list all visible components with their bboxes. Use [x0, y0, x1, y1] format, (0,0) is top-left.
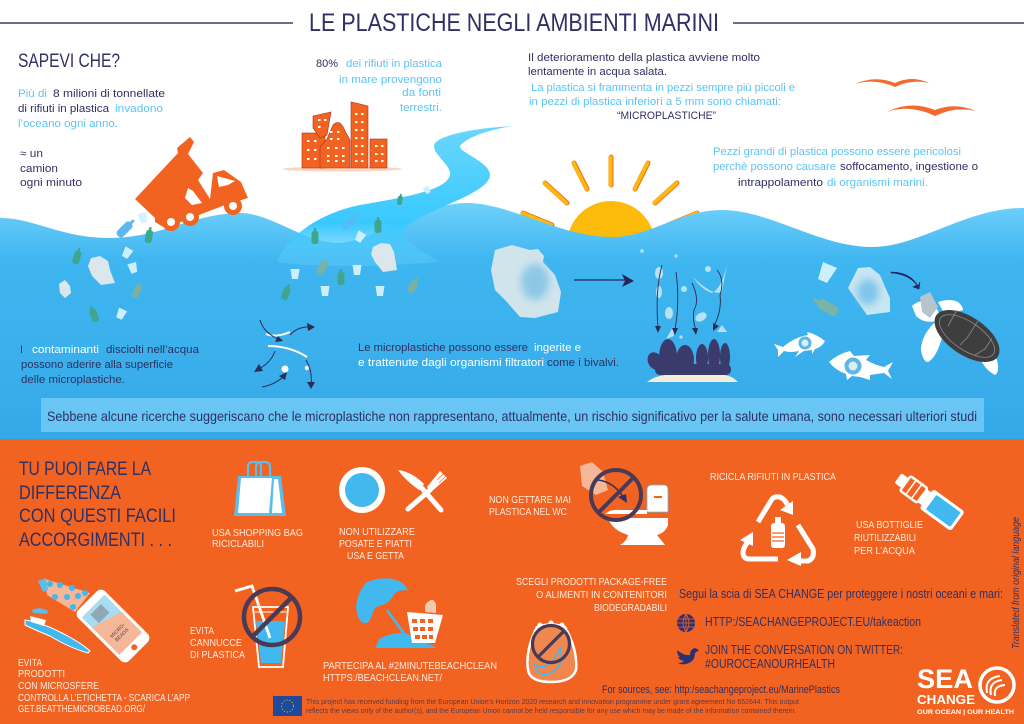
text block: pezzi grandi [713, 146, 978, 189]
icon: seagulls [855, 79, 976, 116]
icon: toilet [580, 462, 668, 545]
arrow: to turtle [891, 272, 920, 289]
text block: pezzi grandi: Pezzi grandi di plastica possono essere pericolosi [713, 146, 961, 158]
text block: 80 percent: dei rifiuti in plastica [346, 58, 443, 70]
text: sources: For sources, see: http:/seachangeproject.eu/MarinePlastics [602, 684, 840, 696]
text block: microplastiche definition [528, 52, 795, 122]
icon: city [282, 102, 402, 172]
label: microsfere: EVITA [18, 657, 42, 669]
text block: 8 milioni di tonnellate: di rifiuti in plastica [18, 103, 110, 115]
icon: toothpaste, toothbrush and phone: MICRO- [109, 622, 127, 640]
icon: EU flag [273, 696, 302, 716]
label: microsfere: CON MICROSFERE [18, 680, 99, 692]
plastic debris: river mouth [280, 185, 431, 301]
text block: 8 milioni di tonnellate: 8 milioni di tonnellate [53, 88, 165, 100]
text block: contaminanti: delle microplastiche. [21, 374, 125, 386]
text block: bivalvi: e trattenute dagli organismi filtratori [358, 357, 544, 369]
label: cannucce: EVITA [190, 625, 214, 637]
text block: pezzi grandi: di organismi marini. [827, 177, 928, 189]
text block: 8 milioni di tonnellate [18, 88, 165, 130]
text block: bivalvi: Le microplastiche possono essere [358, 342, 528, 354]
label: bottiglie: RIUTILIZZABILI [854, 532, 916, 544]
label: package-free: BIODEGRADABILI [594, 602, 667, 614]
text: EU funding disclaimer: reflects the views only of the author(s), and the European Union cannot be held responsible for any use which may be made of the information contained therein. [306, 706, 796, 715]
icon: mussels [645, 339, 738, 382]
label: package-free: SCEGLI PRODOTTI PACKAGE-FREE [516, 576, 667, 588]
text: translated note: Translated from original language [1011, 517, 1022, 649]
heading: tu puoi fare la differenza [19, 459, 176, 551]
label: shopping bag: USA SHOPPING BAG [212, 527, 303, 539]
link: takeaction: HTTP:/SEACHANGEPROJECT.EU/takeaction [705, 614, 921, 629]
label: microsfere: CONTROLLA L’ETICHETTA - SCARICA L’APP [18, 692, 190, 704]
text block: un camion ogni minuto: ogni minuto [20, 177, 82, 189]
icon: globe [677, 614, 695, 632]
text block: pezzi grandi: intrappolamento [738, 177, 823, 189]
text block: un camion ogni minuto: camion [20, 163, 58, 175]
icon: toothpaste, toothbrush and phone [25, 578, 152, 665]
label: cannucce [190, 625, 245, 661]
label: posate e piatti: NON UTILIZZARE [339, 526, 415, 538]
icon: turtle [912, 292, 1008, 375]
large plastic fragment [491, 245, 561, 318]
text block: bivalvi: come i bivalvi. [547, 357, 619, 369]
label: posate e piatti [339, 526, 415, 562]
label: bottiglie: PER L’ACQUA [854, 545, 915, 557]
label: package-free: O ALIMENTI IN CONTENITORI [536, 589, 667, 601]
text block: 80 percent: terrestri. [400, 102, 442, 114]
label: non gettare [489, 494, 571, 518]
icon: fish [774, 332, 893, 380]
label: posate e piatti: POSATE E PIATTI [339, 538, 412, 550]
heading: tu puoi fare la differenza: TU PUOI FARE LA [19, 459, 151, 480]
plastic debris: left [59, 212, 154, 323]
heading: tu puoi fare la differenza: ACCORGIMENTI . . . [19, 530, 172, 551]
icon: dump truck [135, 137, 248, 228]
text block: microplastiche definition: La plastica si frammenta in pezzi sempre più piccoli e [531, 82, 795, 94]
logo: SEA CHANGE: CHANGE [917, 692, 975, 707]
label: ricicla: RICICLA RIFIUTI IN PLASTICA [710, 471, 836, 483]
logo: SEA CHANGE [917, 664, 1014, 716]
plastic debris: near turtle [811, 262, 890, 317]
icon: beach umbrella and basket [356, 578, 443, 648]
icon: twitter bird [677, 648, 699, 664]
icon: microplastic fragments and arrows [640, 249, 727, 339]
label: package-free [516, 576, 667, 614]
icon: toothpaste, toothbrush and phone: BEADS [114, 627, 131, 643]
text block: contaminanti: I [20, 344, 23, 356]
logo: SEA CHANGE: OUR OCEAN | OUR HEALTH [917, 710, 1014, 716]
label: beachclean: PARTECIPA AL #2MINUTEBEACHCLEAN [323, 660, 497, 672]
text block: contaminanti: contaminanti [32, 344, 99, 356]
heading: tu puoi fare la differenza: CON QUESTI FACILI [19, 506, 176, 527]
text block: 80 percent: 80% [316, 58, 338, 70]
text block: bivalvi [358, 342, 619, 369]
label: bottiglie: USA BOTTIGLIE [856, 519, 923, 531]
label: beachclean [323, 660, 497, 684]
banner: rischio per la salute [41, 398, 984, 432]
label: beachclean: HTTPS:/BEACHCLEAN.NET/ [323, 672, 442, 684]
text block: microplastiche definition: lentamente in acqua salata. [528, 66, 667, 78]
text block: contaminanti [20, 344, 200, 386]
icon: contaminant arrows [254, 320, 315, 389]
heading: sapevi che: SAPEVI CHE? [18, 51, 120, 72]
text block: microplastiche definition: in pezzi di plastica inferiori a 5 mm sono chiamati: [529, 96, 781, 108]
label: microsfere: PRODOTTI [18, 668, 65, 680]
heading: tu puoi fare la differenza: DIFFERENZA [19, 483, 121, 504]
text block: 8 milioni di tonnellate: l’oceano ogni anno. [18, 118, 118, 130]
icon: shopping bag [234, 462, 286, 516]
label: cannucce: CANNUCCE [190, 637, 242, 649]
text: join the conversation [705, 642, 903, 671]
text block: 8 milioni di tonnellate: Più di [18, 88, 47, 100]
icon: glass with straw prohibited [235, 586, 300, 667]
text block: microplastiche definition: Il deterioramento della plastica avviene molto [528, 52, 760, 64]
text block: pezzi grandi: perchè possono causare [713, 161, 836, 173]
arrow: fragmentation [574, 274, 634, 287]
label: microsfere: GET.BEATTHEMICROBEAD.ORG/ [18, 703, 145, 715]
icon: plate and cutlery [339, 467, 447, 513]
label: bottiglie [854, 519, 923, 557]
icon: recycle symbol [740, 497, 813, 566]
label: non gettare: PLASTICA NEL WC [489, 506, 567, 518]
label: shopping bag: RICICLABILI [212, 538, 264, 550]
text block: 80 percent [316, 58, 443, 114]
text block: 80 percent: in mare provengono [339, 74, 442, 86]
text: EU funding disclaimer: This project has received funding from the European Union’s Horizon 2020 research and innovation programme under grant agreement No 652644. This output [306, 697, 800, 706]
logo: SEA CHANGE: SEA [917, 664, 973, 694]
panel: orange action section [0, 439, 1024, 724]
text block: contaminanti: disciolti nell’acqua [106, 344, 200, 356]
text block: 80 percent: da fonti [402, 87, 441, 99]
text block: pezzi grandi: soffocamento, ingestione o [840, 161, 978, 173]
text: join the conversation: JOIN THE CONVERSATION ON TWITTER: [705, 642, 903, 657]
title: LE PLASTICHE NEGLI AMBIENTI MARINI [309, 9, 719, 37]
river [277, 126, 512, 266]
text block: microplastiche definition: “MICROPLASTICHE” [617, 110, 716, 122]
text: EU funding disclaimer [306, 697, 800, 715]
label: shopping bag [212, 527, 303, 550]
label: cannucce: DI PLASTICA [190, 649, 245, 661]
text block: un camion ogni minuto: ≈ un [20, 148, 43, 160]
text block: 8 milioni di tonnellate: invadono [115, 103, 163, 115]
text block: contaminanti: possono aderire alla superficie [21, 359, 173, 371]
label: posate e piatti: USA E GETTA [347, 550, 404, 562]
label: microsfere [18, 657, 190, 715]
text block: un camion ogni minuto [20, 148, 82, 189]
panel: ocean [0, 203, 1024, 440]
text: join the conversation: #OUROCEANOURHEALTH [705, 656, 835, 671]
icon: plastic bag with bananas prohibited [527, 620, 576, 682]
label: non gettare: NON GETTARE MAI [489, 494, 571, 506]
text block: bivalvi: ingerite e [534, 342, 581, 354]
icon: sun [522, 157, 697, 289]
icon: reusable bottle [891, 468, 965, 531]
